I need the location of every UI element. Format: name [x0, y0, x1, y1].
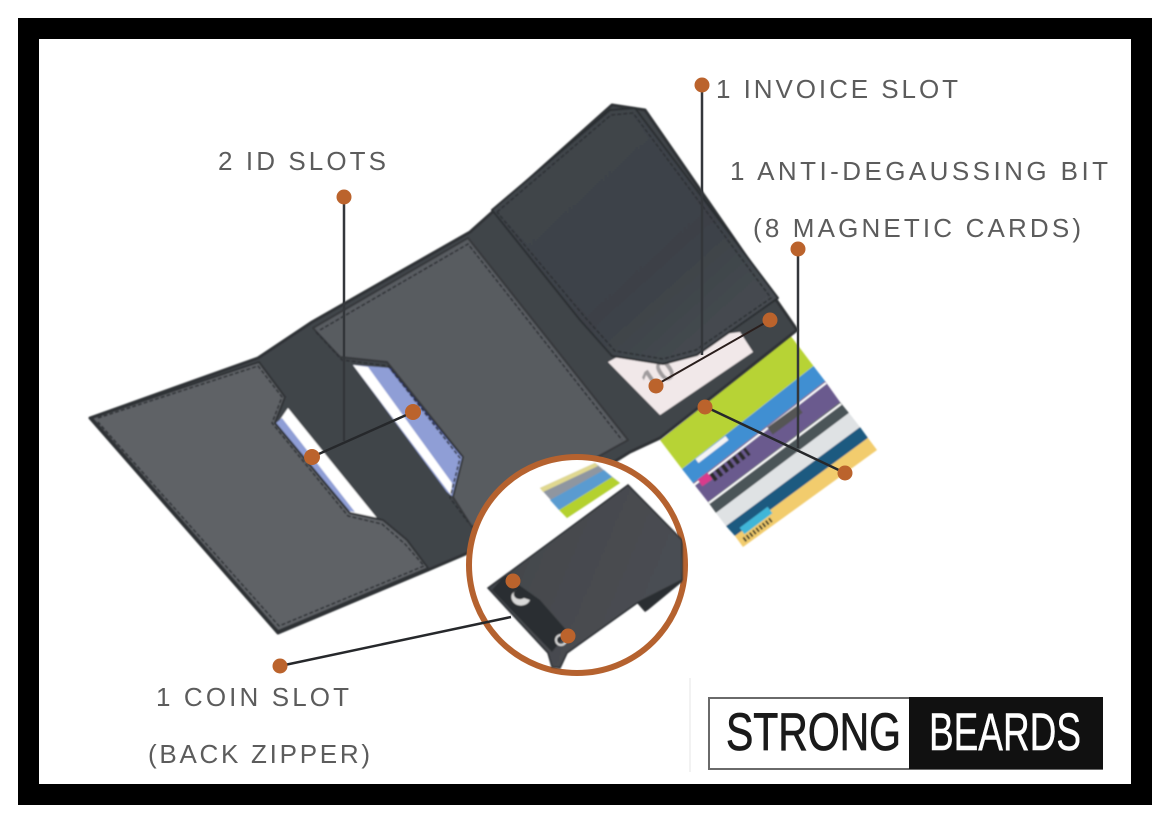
magnetic cards [660, 335, 877, 547]
card: dark blue [726, 427, 868, 536]
cross line [656, 320, 770, 385]
flap stitching [497, 113, 771, 359]
logo: Strong Beards [709, 697, 1103, 769]
text line one: 1 ANTI-DEGAUSSING BIT [730, 156, 1108, 186]
label: anti-degaussing bit [698, 156, 1108, 480]
card: green [660, 335, 814, 469]
leader line [701, 85, 703, 355]
panel: flap leather [492, 108, 778, 364]
dots [648, 78, 778, 394]
wallet body [90, 105, 797, 633]
banknote [608, 332, 753, 415]
panel: middle leather [313, 238, 628, 527]
logo box [709, 698, 1102, 769]
label: coin slot [148, 574, 576, 769]
dots [698, 242, 852, 480]
panel: left leather [92, 362, 428, 631]
card: light [716, 413, 860, 526]
banknote: 10 [635, 353, 682, 399]
cross line [706, 407, 845, 473]
logo word: STRONG: STRONG [726, 703, 901, 762]
card: blue [682, 366, 825, 483]
label: 2 ID slots [218, 146, 421, 465]
leader line [280, 617, 511, 666]
zipper pull [556, 635, 566, 645]
text line two: (8 MAGNETIC CARDS) [753, 213, 1081, 243]
right ID card [353, 365, 463, 497]
leader line [797, 249, 799, 448]
dots [304, 190, 421, 465]
text: 1 INVOICE SLOT [716, 74, 958, 104]
cross line [312, 412, 413, 457]
logo word: BEARDS: BEARDS [929, 703, 1081, 762]
inset circle [469, 457, 685, 673]
logo black panel [909, 697, 1103, 769]
card: grey [708, 402, 849, 513]
left slot backing [260, 397, 410, 560]
zipper ring [511, 590, 530, 606]
text line one: 1 COIN SLOT [156, 682, 349, 712]
leader line [343, 197, 345, 441]
left ID card [276, 408, 377, 518]
divider [689, 678, 691, 772]
circle ring [469, 457, 685, 673]
mini cards [488, 463, 682, 668]
card: purple [693, 381, 840, 502]
back of small wallet [488, 485, 682, 668]
zipper [492, 575, 568, 652]
card detail stripes [694, 383, 841, 540]
text line two: (BACK ZIPPER) [148, 739, 370, 769]
stitching [98, 244, 622, 626]
card: gold [735, 438, 877, 547]
side tab [637, 580, 682, 612]
wallet [90, 105, 797, 633]
label: invoice slot [648, 74, 958, 394]
dots [272, 574, 576, 674]
text: 2 ID SLOTS [218, 146, 386, 176]
